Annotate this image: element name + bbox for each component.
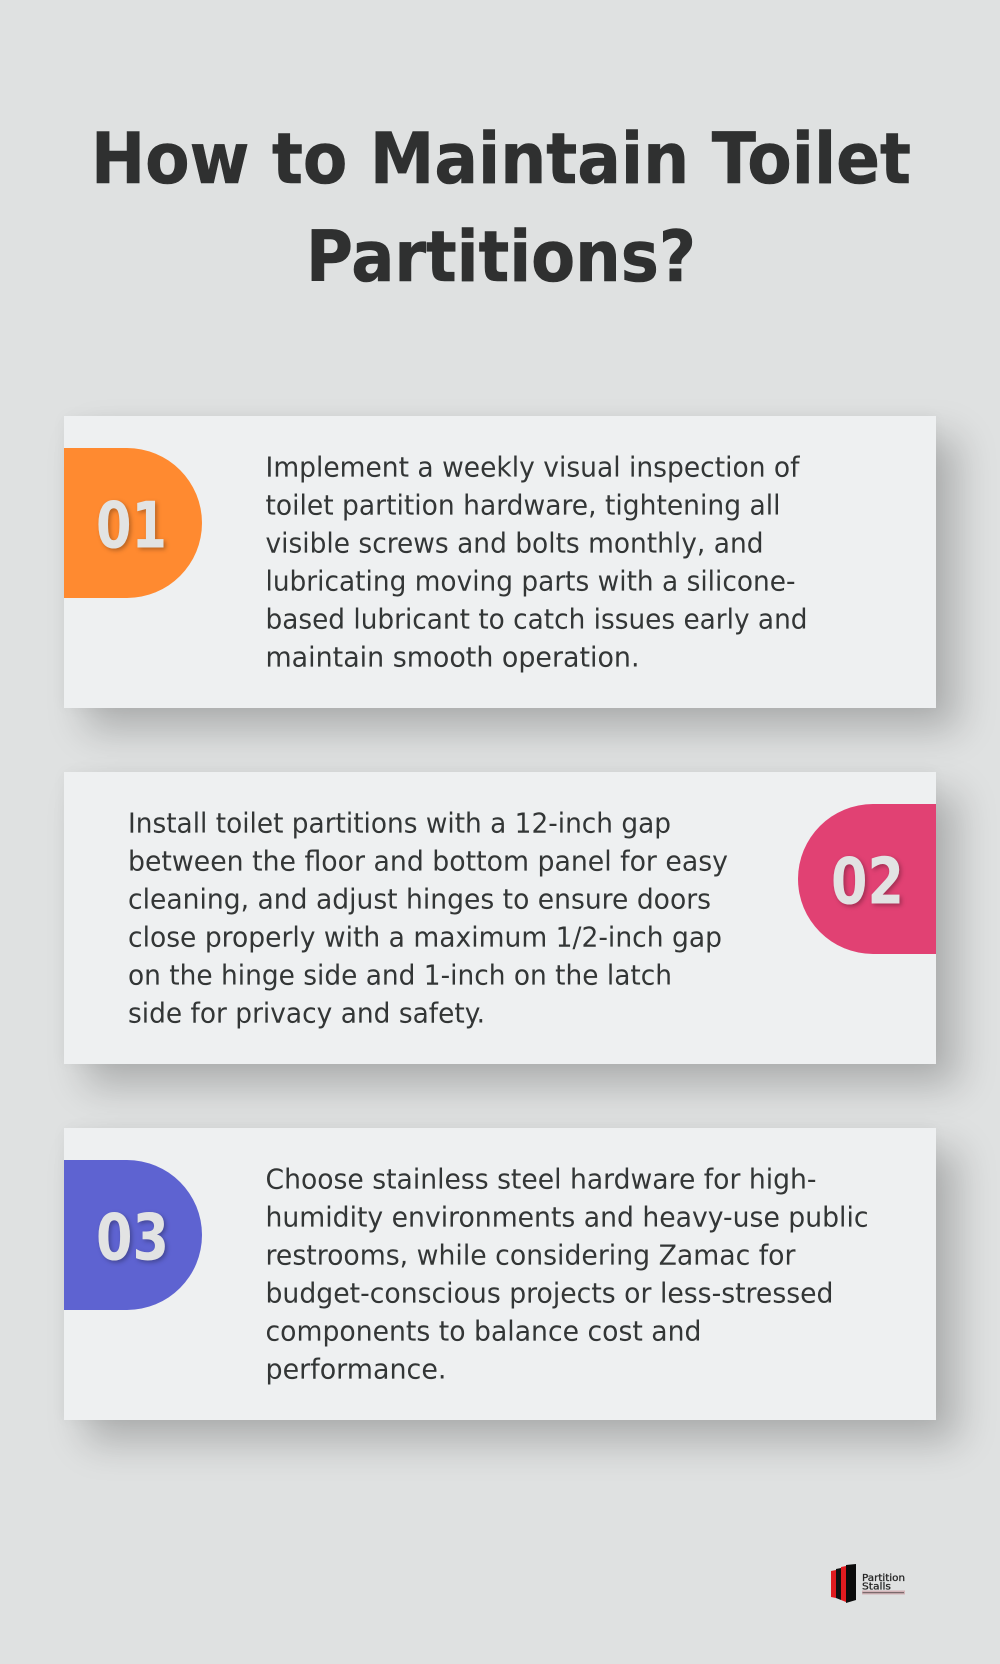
text: step 02: Install toilet partitions with a 12-inch gap xyxy=(128,807,671,839)
text: step 01: lubricating moving parts with a silicone- xyxy=(266,565,796,597)
icon: partition panels xyxy=(831,1564,856,1603)
logo wordmark: Stalls xyxy=(862,1582,891,1592)
badge: 03 xyxy=(64,1160,202,1310)
text: step 01: toilet partition hardware, tightening all xyxy=(266,489,780,521)
text: step 03: Choose stainless steel hardware for high- xyxy=(266,1163,816,1195)
text: step 01 xyxy=(266,451,808,673)
badge: 01 xyxy=(64,448,202,598)
text: step 01: visible screws and bolts monthly, and xyxy=(266,527,764,559)
logo wordmark xyxy=(862,1573,905,1594)
badge: 01: 01 xyxy=(96,490,167,564)
text: step 01: maintain smooth operation. xyxy=(266,641,640,673)
text: step 03: restrooms, while considering Zamac for xyxy=(266,1239,796,1271)
badge: 03: 03 xyxy=(96,1202,169,1276)
title: Partitions? xyxy=(306,216,696,298)
text: step 03: components to balance cost and xyxy=(266,1315,702,1347)
text: step 02 xyxy=(128,807,728,1029)
text: step 01: Implement a weekly visual inspection of xyxy=(266,451,801,483)
panel: step 01 xyxy=(64,416,936,708)
text: step 03 xyxy=(266,1163,868,1385)
panel: step 02 xyxy=(64,772,936,1064)
text: step 02: close properly with a maximum 1/2-inch gap xyxy=(128,921,722,953)
panel: step 03 xyxy=(64,1128,936,1420)
text: step 02: cleaning, and adjust hinges to ensure doors xyxy=(128,883,711,915)
text: step 02: on the hinge side and 1-inch on the latch xyxy=(128,959,672,991)
text: step 03: performance. xyxy=(266,1353,446,1385)
text: step 03: humidity environments and heavy-use public xyxy=(266,1201,868,1233)
logo: Partition Stalls xyxy=(831,1564,905,1603)
text: step 02: side for privacy and safety. xyxy=(128,997,485,1029)
text: step 02: between the floor and bottom panel for easy xyxy=(128,845,728,877)
badge: 02: 02 xyxy=(831,846,904,920)
text: step 03: budget-conscious projects or less-stressed xyxy=(266,1277,834,1309)
badge: 02 xyxy=(798,804,936,954)
text: step 01: based lubricant to catch issues early and xyxy=(266,603,808,635)
title: How to Maintain Toilet xyxy=(91,118,911,200)
title xyxy=(91,118,911,298)
logo wordmark: Partition xyxy=(862,1573,905,1584)
